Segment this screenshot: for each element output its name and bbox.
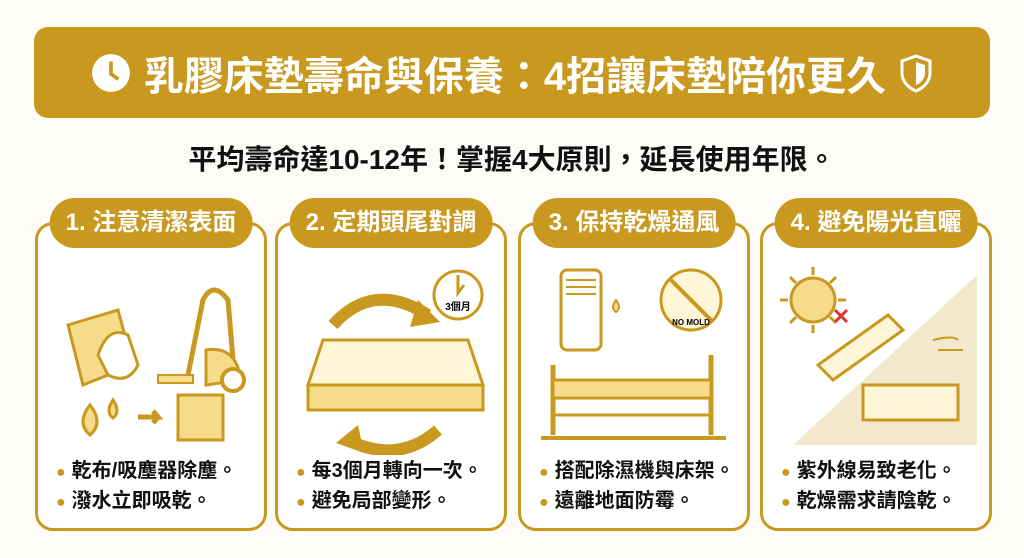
icon: dehumidifier bed no-mold: NO MOLD — [672, 318, 710, 327]
bullets — [296, 460, 483, 512]
bullets — [781, 460, 957, 512]
title — [34, 27, 990, 118]
panel: sunlight: 4. 避免陽光直曬 — [791, 209, 961, 236]
icon: shield — [900, 54, 932, 93]
icon: mattress with arrows and clock — [306, 270, 485, 455]
icon: sun, tilted mattress, shade — [780, 267, 977, 445]
panel: dry: 3. 保持乾燥通風 — [549, 209, 719, 236]
panel: dry — [518, 222, 750, 531]
bullets: ● 潑水立即吸乾。 — [56, 490, 212, 512]
bullets — [539, 460, 735, 512]
panel: cleaning — [35, 222, 267, 531]
bullets: ● 避免局部變形。 — [296, 490, 452, 512]
icon: cloth vacuum drops towel — [66, 288, 246, 442]
bullets: ● 乾布/吸塵器除塵。 — [56, 460, 237, 482]
icon: dehumidifier bed no-mold — [541, 268, 726, 440]
bullets — [56, 460, 237, 512]
panel: rotate — [275, 222, 507, 531]
bullets: ● 搭配除濕機與床架。 — [539, 460, 735, 482]
bullets: ● 每3個月轉向一次。 — [296, 460, 483, 482]
bullets: ● 乾燥需求請陰乾。 — [781, 490, 957, 512]
icon: mattress with arrows and clock: 3個月 — [445, 300, 471, 313]
panel: sunlight — [760, 222, 992, 531]
title: 乳膠床墊壽命與保養：4招讓床墊陪你更久 — [144, 54, 886, 98]
panel: rotate: 2. 定期頭尾對調 — [306, 209, 476, 236]
icon: clock — [92, 54, 130, 92]
panel: cleaning: 1. 注意清潔表面 — [66, 209, 236, 236]
bullets: ● 紫外線易致老化。 — [781, 460, 957, 482]
subtitle: 平均壽命達10-12年！掌握4大原則，延長使用年限。 — [188, 144, 836, 175]
bullets: ● 遠離地面防霉。 — [539, 490, 695, 512]
